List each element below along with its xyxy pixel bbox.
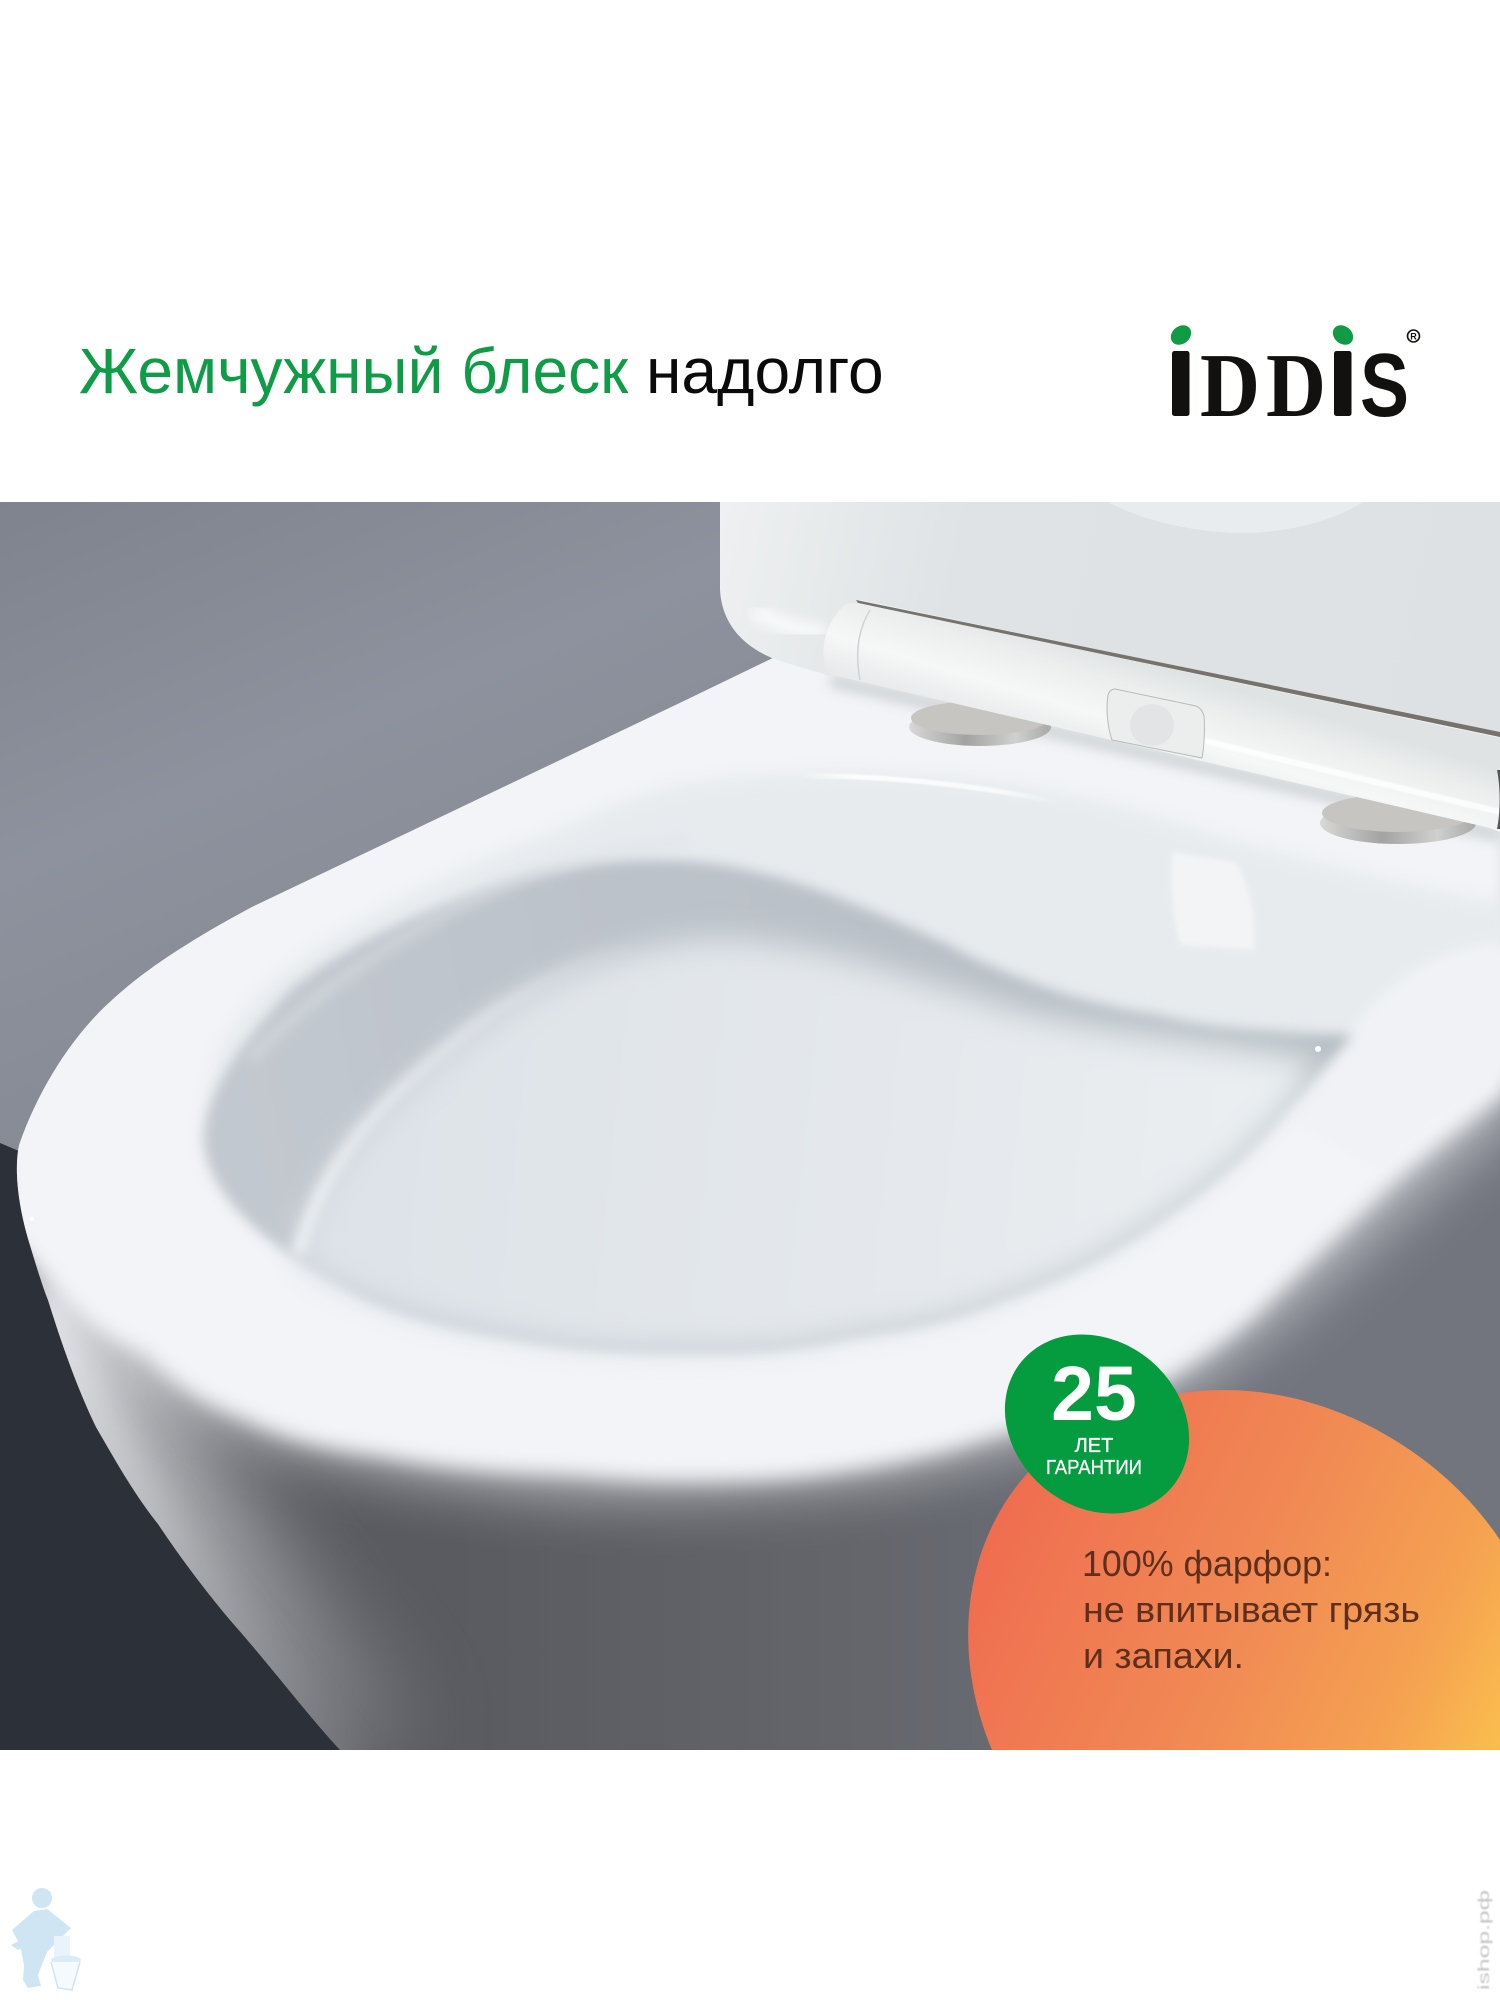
body left edge highlight [40,1290,345,1780]
callout line 2: не впитывает грязь [1083,1589,1420,1630]
logo letter S: S [1360,336,1409,436]
lid corner highlight [755,610,825,632]
lower body shade [0,1000,1500,1750]
bowl inner streak [290,985,536,1256]
badge label line 2: ГАРАНТИИ [1046,1457,1142,1479]
hinge bar highlight [1180,735,1500,812]
drain droplet highlight [1315,1046,1321,1052]
logo letter I second [1334,351,1352,416]
hinge disc left [909,701,1051,746]
bowl well side wall [204,860,1353,1352]
logo registered mark: R [1410,332,1417,342]
back shelf and bowl opening [220,778,1494,1065]
logo registered mark [1408,330,1420,342]
callout line 3: и запахи. [1083,1635,1244,1676]
logo: IDDIS [1167,321,1420,436]
green badge [969,1297,1225,1551]
logo letter I [1172,351,1190,416]
callout text [1082,1543,1420,1676]
hinge bar cap line [858,610,870,680]
logo green dot left [1167,321,1195,349]
photo: toilet bowl [0,500,1500,1780]
mascot torso and legs [12,1909,71,1988]
logo green dot right [1329,321,1357,349]
logo letter D second: D [1266,335,1326,436]
mascot head [32,1888,52,1908]
lid recessed ellipse [1108,502,1363,533]
title: Жемчужный блеск надолго [79,335,884,407]
orange blob [968,1390,1500,1750]
hinge bar [824,603,1500,832]
upper wall streak [255,892,498,1054]
mascot wrench arm [11,1932,44,1950]
ceramic body and rim [16,600,1500,1750]
body left wide glow [30,1290,345,1780]
watermark mascot: plumber with toilet [11,1888,81,1990]
wall [0,502,1500,1151]
badge shape [969,1297,1225,1551]
bowl floor / water [296,940,1320,1352]
callout line 1: 100% фарфор: [1082,1543,1332,1584]
shelf reflection [1171,852,1254,950]
hinge bar end cap [1497,770,1500,829]
logo letter D: D [1200,335,1260,436]
hinge disc right [1320,794,1476,844]
hinge shadow [830,680,1500,835]
badge number: 25 [1051,1351,1137,1437]
toilet seat lid [720,502,1500,733]
release button [1107,689,1204,758]
rim inner highlight back [824,774,1024,796]
rim top surface [0,500,1500,1481]
watermark vertical site text: ishop.рф [1476,1890,1493,1990]
rim sparkle [30,1217,34,1221]
mascot toilet [51,1936,81,1990]
seat gap line [856,600,1500,737]
badge label line 1: ЛЕТ [1075,1435,1113,1457]
floor [0,1143,340,1750]
right rim blend [1500,970,1501,1066]
rim soft glow [16,658,1500,1530]
